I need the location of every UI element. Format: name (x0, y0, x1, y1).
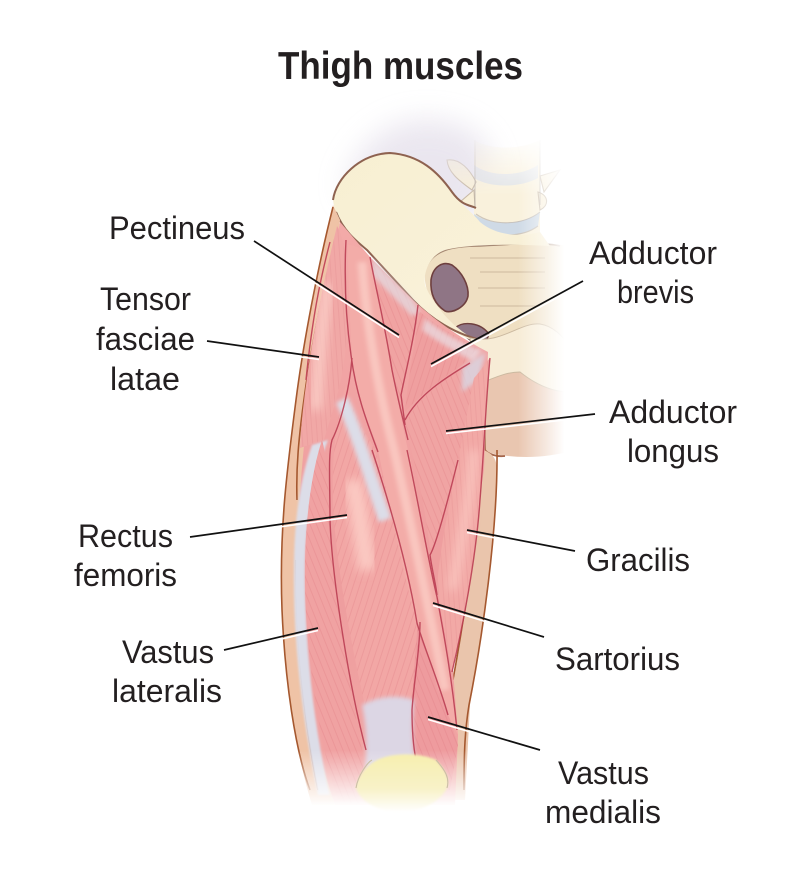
label: Adductor brevis: Adductor (589, 235, 717, 271)
label: Gracilis: Gracilis (586, 542, 690, 578)
label: Adductor longus: Adductor (609, 394, 737, 430)
obturator foramen large (431, 264, 468, 312)
adductor brevis (405, 312, 482, 412)
femoral head right (484, 364, 575, 457)
fade at bottom of leg (270, 750, 480, 812)
hip bone ilium (333, 153, 550, 345)
label: Vastus lateralis: Vastus (122, 634, 214, 670)
sacrum and pubic bone area (425, 244, 570, 343)
skin band outline right (453, 450, 497, 790)
gracilis (437, 358, 490, 672)
label: Adductor longus: longus (627, 433, 719, 469)
label: Tensor fasciae latae (96, 281, 319, 397)
label: Tensor fasciae latae: latae (110, 361, 180, 397)
skin band right (450, 450, 497, 800)
vastus lateralis (305, 440, 364, 805)
label: Vastus lateralis: lateralis (112, 673, 222, 709)
muscle base (298, 222, 488, 805)
label: Pectineus (109, 210, 399, 338)
label: Vastus lateralis (112, 628, 318, 709)
iliotibial band (294, 440, 330, 795)
label: Adductor brevis: brevis (617, 274, 694, 310)
infographic canvas (74, 50, 736, 824)
lavender haze behind pelvis (345, 120, 492, 225)
label: Rectus femoris: Rectus (78, 518, 173, 554)
patella and femur end (356, 754, 448, 812)
label: Sartorius: Sartorius (555, 641, 680, 677)
obturator foramen small (455, 324, 489, 342)
label: Vastus medialis (428, 717, 661, 830)
label: Pectineus: Pectineus (109, 210, 245, 246)
hip socket bones right (470, 324, 570, 392)
vastus medialis (411, 620, 458, 790)
label: Vastus medialis: medialis (545, 794, 661, 830)
label: Adductor brevis (431, 235, 717, 366)
pectineus (372, 258, 420, 412)
skin band outlines left (281, 207, 342, 790)
hip bone outline (333, 153, 486, 341)
title: Thigh muscles (278, 45, 523, 88)
rectus femoris (333, 385, 422, 720)
label: Tensor fasciae latae: fasciae (96, 321, 195, 357)
label: Rectus femoris (74, 515, 347, 593)
label: Rectus femoris: femoris (74, 557, 177, 593)
illustration: thigh anatomy (270, 120, 580, 812)
quadriceps tendon (362, 697, 417, 780)
spine vertebrae (446, 144, 558, 235)
muscle separators (330, 240, 490, 760)
adductor longus (404, 352, 486, 550)
label: Tensor fasciae latae: Tensor (100, 281, 191, 317)
skin band left (281, 205, 340, 805)
label: Gracilis (467, 530, 690, 578)
label: Adductor longus (446, 394, 737, 469)
label: Vastus medialis: Vastus (558, 755, 649, 791)
fade right of pelvis (518, 120, 580, 470)
sartorius (348, 245, 458, 735)
label: Sartorius (433, 603, 680, 677)
tensor fasciae latae (300, 226, 347, 448)
